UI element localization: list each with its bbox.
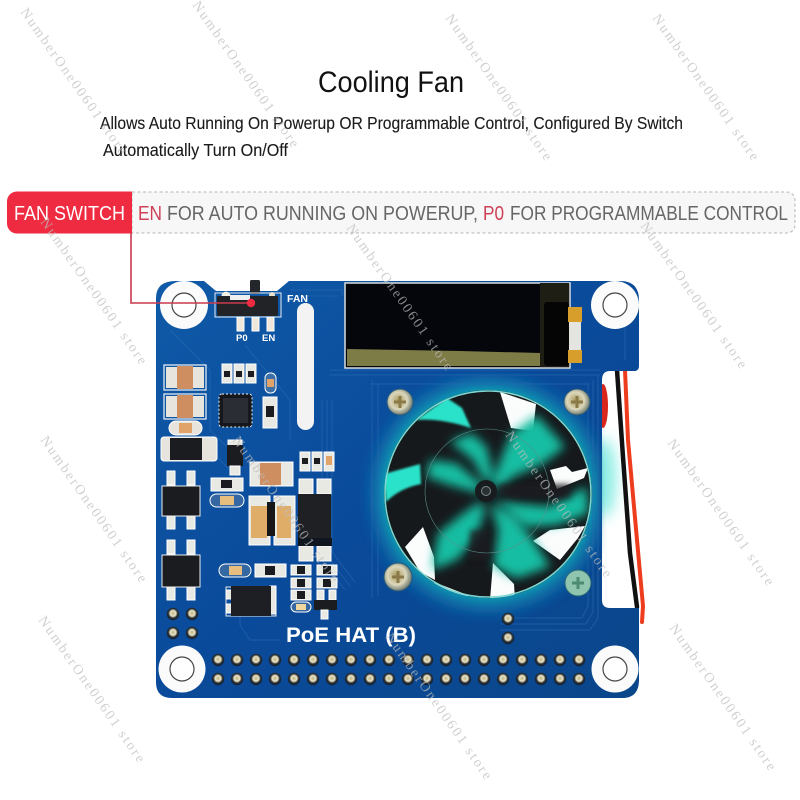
description line 1: Allows Auto Running On Powerup OR Programmable Control, Configured By Switch [100, 113, 683, 133]
small cap pair [210, 478, 244, 507]
bridge rectifier 2 [162, 540, 200, 600]
board outline [156, 281, 639, 698]
ceramic capacitor [250, 462, 293, 486]
copper traces [170, 290, 625, 640]
teal blade streaks [427, 415, 588, 578]
watermarks: NumberOne00601 store [17, 6, 129, 158]
diode [227, 440, 243, 475]
slot [297, 303, 314, 430]
title: Cooling Fan [318, 66, 464, 99]
fan rim [385, 391, 591, 597]
description line 2: Automatically Turn On/Off [103, 140, 288, 160]
label: FAN: FAN [287, 293, 308, 305]
callout line to switch [131, 233, 255, 307]
diode package [161, 437, 217, 461]
mounting hole top right [591, 281, 639, 329]
mounting hole bottom left [158, 646, 206, 692]
watermarks: NumberOne00601 store [35, 614, 147, 766]
watermarks: NumberOne00601 store [37, 216, 149, 368]
inductor 2 [164, 394, 206, 419]
controller chip [219, 394, 252, 427]
watermarks: NumberOne00601 store [637, 220, 749, 372]
dark hub band [470, 484, 570, 560]
slide switch [215, 280, 281, 331]
watermarks: NumberOne00601 store [382, 631, 494, 783]
screw top right [564, 389, 590, 415]
small parts [263, 373, 277, 428]
board label: PoE HAT (B) [286, 624, 416, 647]
hub ring [425, 429, 549, 553]
watermarks: NumberOne00601 store [666, 622, 778, 774]
large diode [226, 586, 276, 616]
banner: fan switch explanation [7, 192, 795, 234]
lower small parts [219, 564, 286, 577]
fan centre cap [475, 480, 497, 502]
watermarks: NumberOne00601 store [442, 12, 554, 164]
label: EN: EN [138, 202, 162, 225]
tantalum capacitors [249, 496, 295, 545]
cooling fan [384, 390, 592, 600]
regulator [298, 479, 332, 561]
fan windows [405, 392, 588, 600]
label: fan switch: FAN SWITCH [14, 202, 125, 225]
fan glow on board [354, 374, 601, 628]
bridge rectifier 1 [162, 471, 200, 529]
through-hole pads [167, 608, 198, 639]
cyan blade highlights [384, 398, 471, 502]
fan housing [384, 390, 592, 598]
circuit board [156, 280, 639, 698]
screw bottom right [565, 570, 591, 596]
power components [161, 364, 337, 639]
label: P0: P0 [483, 202, 504, 225]
resistor matrix [291, 565, 337, 619]
OLED display [345, 283, 582, 368]
label: P0: P0 [236, 333, 248, 344]
mounting hole top left [160, 281, 208, 329]
inductor 1 [164, 365, 206, 390]
watermarks: NumberOne00601 store [664, 437, 776, 589]
label: auto running: FOR AUTO RUNNING ON POWERUP, [167, 202, 478, 225]
label: EN: EN [262, 333, 275, 344]
resistor trio [300, 452, 334, 471]
watermarks: NumberOne00601 store [229, 434, 341, 586]
GPIO header pins [212, 613, 585, 685]
watermarks: NumberOne00601 store [37, 434, 149, 586]
watermarks: NumberOne00601 store [343, 222, 455, 374]
banner label tab [7, 192, 132, 234]
fan glow in board notch [592, 438, 616, 518]
wires [617, 370, 643, 622]
mounting hole bottom right [592, 646, 638, 692]
small capacitor [169, 421, 202, 435]
screw top left [387, 389, 413, 415]
red blob behind board [598, 384, 608, 428]
resistor array [222, 364, 256, 383]
banner body [132, 192, 795, 233]
screw bottom left [384, 563, 412, 591]
watermarks: NumberOne00601 store [189, 0, 301, 151]
watermarks: NumberOne00601 store [649, 12, 761, 164]
watermarks: NumberOne00601 store [502, 429, 614, 581]
